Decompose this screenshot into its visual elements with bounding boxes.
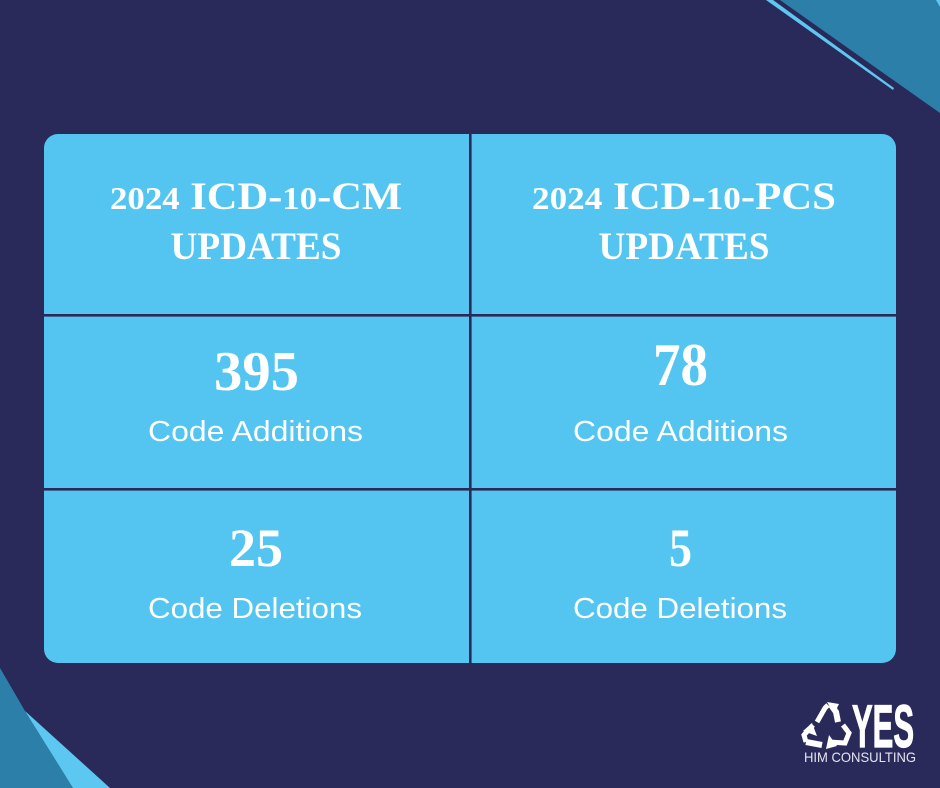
decoration: top-right corner shapes — [766, 0, 940, 113]
logo: YES HIM Consulting — [803, 693, 916, 765]
icon: recycling arrows — [803, 702, 849, 749]
stat: 78 PCS code additions: 78 — [653, 332, 708, 398]
stat: 5 PCS code deletions: Code Deletions — [573, 593, 787, 625]
stat: 5 PCS code deletions — [573, 518, 787, 625]
stat: 395 CM code additions — [148, 341, 363, 448]
heading: ICD-10-PCS updates: UPDATES — [598, 225, 770, 268]
stat: 25 CM code deletions: 25 — [229, 518, 283, 578]
stat: 25 CM code deletions — [148, 518, 362, 625]
stat: 395 CM code additions: Code Additions — [148, 416, 363, 448]
stat: 25 CM code deletions: Code Deletions — [148, 593, 362, 625]
heading: ICD-10-CM updates: 2024 ICD- 10-CM — [110, 175, 402, 218]
heading: ICD-10-PCS updates: 2024 ICD- 10-PCS — [532, 175, 836, 218]
logo tagline: HIM CONSULTING — [804, 749, 916, 765]
decoration: bottom-left corner shapes — [0, 668, 110, 788]
heading: ICD-10-CM updates — [110, 175, 402, 268]
heading: ICD-10-PCS updates — [532, 175, 836, 268]
heading: ICD-10-CM updates: UPDATES — [170, 225, 342, 268]
panel: updates table — [44, 134, 896, 663]
stat: 5 PCS code deletions: 5 — [669, 518, 692, 578]
stat: 395 CM code additions: 395 — [214, 341, 299, 403]
stat: 78 PCS code additions — [573, 332, 788, 448]
stat: 78 PCS code additions: Code Additions — [573, 416, 788, 448]
